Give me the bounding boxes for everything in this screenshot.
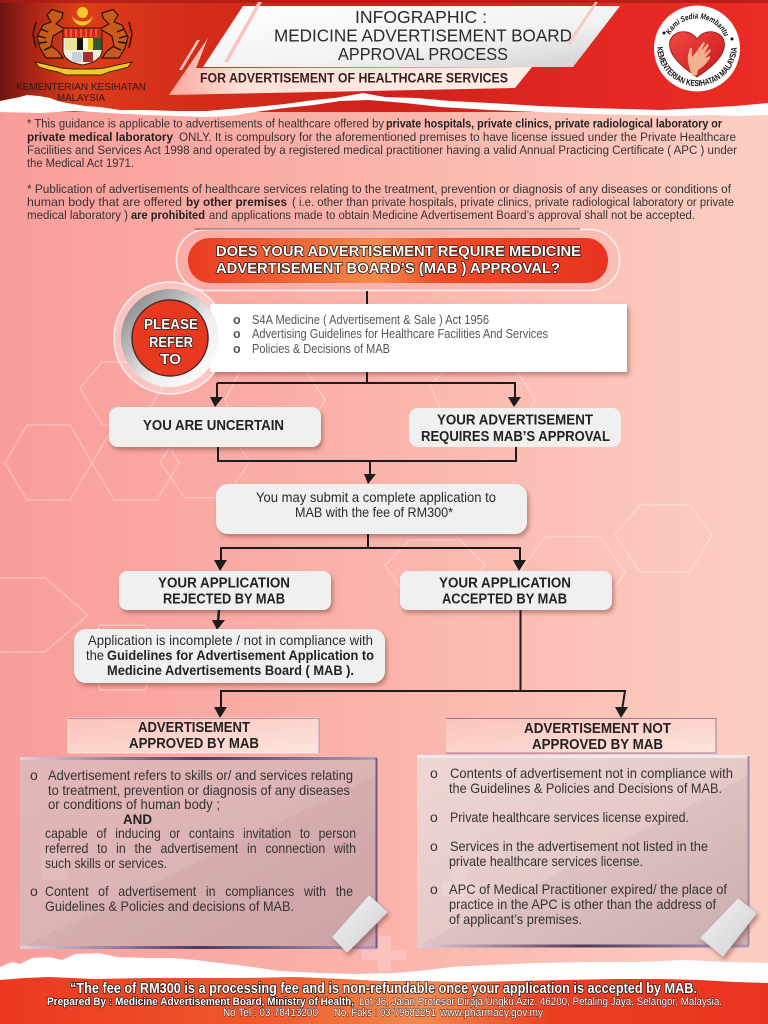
panel: references list: o [233, 327, 241, 341]
box: you are uncertain [109, 407, 321, 447]
faint cross watermark [362, 936, 406, 972]
arrow: rejected to reason [212, 610, 225, 630]
panel: references list: o [233, 313, 241, 327]
intro paragraph 2 [27, 182, 734, 222]
intro paragraph 2: are prohibited [131, 208, 205, 222]
box: application accepted [400, 571, 612, 610]
footer band [0, 953, 768, 1024]
panel: approved criteria: or conditions of human body ; [48, 796, 220, 812]
preparer credit: Lot 36, Jalan Profesor Diraja Ungku Aziz, 46200, Petaling Jaya, Selangor, Malaysia. [359, 996, 722, 1008]
badge: please refer to: TO [160, 352, 181, 368]
panel: approved criteria: such skills or services. [45, 855, 167, 871]
icon: ministry heart logo: KEMENTERIAN KESIHATAN MALAYSIA [657, 47, 738, 86]
panel: not approved criteria: o [430, 765, 438, 781]
panel: not approved criteria: the Guidelines & Policies and Decisions of MAB. [449, 780, 722, 796]
heading: advertisement approved: ADVERTISEMENT [138, 720, 250, 736]
intro paragraph 2: human body that are offered [27, 195, 182, 209]
box: rejection reason [74, 629, 385, 683]
icon: tape corner left [332, 895, 388, 953]
box: requires MAB approval: YOUR ADVERTISEMENT [437, 412, 593, 428]
intro paragraph 1: ONLY. It is compulsory for the aforementioned premises to have license issued under the Private Healthcare [179, 130, 736, 144]
box: application rejected [119, 571, 331, 610]
question pill [176, 229, 620, 290]
contact line: No. Faks : 03-79682251 [334, 1007, 436, 1019]
icon: ministry heart logo [654, 6, 740, 92]
arrow: branches merge to submit [218, 447, 516, 484]
arrows: references to branches [210, 372, 521, 407]
badge: please refer to: REFER [149, 335, 193, 351]
contact line [223, 1007, 543, 1019]
intro paragraph 1: private hospitals, private clinics, private radiological laboratory or [386, 116, 722, 130]
intro paragraph 1: Facilities and Services Act 1998 and operated by a registered medical practitioner having a valid Annual Practicing Certificate ( APC ) under [27, 143, 737, 157]
heading: advertisement approved: APPROVED BY MAB [129, 736, 259, 752]
panel: approved criteria: referred to in the advertisement in connection with [45, 840, 356, 856]
heading: advertisement not approved: APPROVED BY MAB [532, 737, 663, 753]
title banner [169, 2, 620, 95]
contact line: No Tel : 03-78413200 [223, 1007, 318, 1019]
icon: tape corner right [700, 898, 757, 957]
panel: approved criteria: o [30, 767, 38, 783]
box: rejection reason: Application is incomplete / not in compliance with [88, 632, 373, 648]
panel: not approved criteria: o [430, 809, 438, 825]
icon: Malaysian coat of arms [33, 7, 132, 75]
connector: question to references [366, 291, 368, 305]
intro paragraph 2: and applications made to obtain Medicine Advertisement Board’s approval shall not be accepted. [209, 208, 695, 222]
panel: approved criteria: AND [123, 811, 152, 827]
intro paragraph 2: medical laboratory ) [27, 208, 128, 222]
badge: please refer to: PLEASE [144, 317, 198, 333]
arrows: accepted to decisions [214, 610, 628, 718]
header band [0, 0, 768, 112]
panel: references list: Policies & Decisions of MAB [252, 342, 390, 356]
box: submit application: MAB with the fee of RM300* [295, 504, 453, 520]
intro paragraph 2: ( i.e. other than private hospitals, private clinics, private radiological laboratory or private [292, 195, 734, 209]
heading: advertisement approved [68, 718, 319, 753]
panel: approved criteria: capable of inducing or contains invitation to person [45, 825, 356, 841]
contact line: www.pharmacy.gov.my [439, 1007, 543, 1019]
intro paragraph 1 [27, 116, 737, 170]
panel: not approved criteria: Contents of advertisement not in compliance with [450, 765, 733, 781]
box: rejection reason: Guidelines for Advertisement Application to [107, 647, 374, 663]
icon: ministry heart logo: Kami Sedia Membantu [666, 12, 728, 36]
panel: not approved criteria: Services in the advertisement not listed in the [450, 838, 708, 854]
panel: not approved criteria: private healthcare services license. [449, 853, 643, 869]
torn paper edge top [0, 93, 768, 117]
box: you are uncertain: YOU ARE UNCERTAIN [143, 418, 284, 434]
preparer credit: Prepared By : Medicine Advertisement Board, Ministry of Health, [47, 996, 354, 1008]
badge: please refer to [114, 282, 226, 394]
box: application accepted: ACCEPTED BY MAB [442, 592, 567, 608]
panel: not approved criteria: o [430, 881, 438, 897]
intro paragraph 2: * Publication of advertisements of healthcare services relating to the treatment, prevention or diagnosis of any diseases or conditions of [27, 182, 732, 196]
panel: not approved criteria: APC of Medical Practitioner expired/ the place of [449, 881, 727, 897]
box: rejection reason: the [86, 647, 104, 663]
panel: approved criteria: Guidelines & Policies and decisions of MAB. [45, 898, 294, 914]
preparer credit [47, 996, 722, 1008]
question pill: ADVERTISEMENT BOARD’S (MAB ) APPROVAL? [216, 261, 560, 277]
ministry name: MALAYSIA [57, 93, 105, 104]
hexagon background pattern [0, 360, 712, 690]
arrows: submit to outcomes [214, 534, 526, 571]
box: application accepted: YOUR APPLICATION [439, 576, 571, 592]
intro paragraph 2: by other premises [186, 195, 287, 209]
panel: not approved criteria: Private healthcare services license expired. [450, 809, 689, 825]
ministry name: KEMENTERIAN KESIHATAN [16, 82, 146, 93]
box: application rejected: REJECTED BY MAB [163, 592, 285, 608]
title text: INFOGRAPHIC : [355, 7, 487, 27]
panel: not approved criteria: of applicant’s premises. [449, 911, 582, 927]
panel: not approved criteria: o [430, 838, 438, 854]
heading: advertisement not approved: ADVERTISEMENT NOT [524, 721, 671, 737]
panel: not approved criteria [417, 755, 750, 948]
box: requires MAB approval: REQUIRES MAB’S APPROVAL [421, 429, 610, 445]
fee note: “The fee of RM300 is a processing fee and is non-refundable once your application is accepted by MAB. [70, 981, 697, 997]
intro paragraph 1: the Medical Act 1971. [27, 156, 134, 170]
question pill: DOES YOUR ADVERTISEMENT REQUIRE MEDICINE [216, 244, 581, 260]
title text [274, 7, 572, 64]
intro paragraph 1: * This guidance is applicable to advertisements of healthcare offered by [27, 116, 385, 130]
panel: approved criteria: to treatment, prevention or diagnosis of any diseases [48, 782, 350, 798]
panel: approved criteria: o [30, 883, 38, 899]
intro paragraph 1: private medical laboratory [27, 130, 173, 144]
box: rejection reason: Medicine Advertisements Board ( MAB ). [107, 662, 354, 678]
panel: references list [210, 304, 627, 372]
subtitle: FOR ADVERTISEMENT OF HEALTHCARE SERVICES [200, 70, 508, 86]
box: application rejected: YOUR APPLICATION [158, 576, 290, 592]
panel: references list: Advertising Guidelines for Healthcare Facilities And Services [252, 327, 548, 341]
panel: references list: S4A Medicine ( Advertisement & Sale ) Act 1956 [252, 313, 489, 327]
title text: MEDICINE ADVERTISEMENT BOARD [274, 26, 572, 46]
box: requires MAB approval [409, 408, 621, 447]
panel: approved criteria: Content of advertisement in compliances with the [45, 883, 353, 899]
panel: references list: o [233, 342, 241, 356]
panel: approved criteria [20, 757, 378, 949]
panel: approved criteria: Advertisement refers to skills or/ and services relating [48, 767, 353, 783]
box: submit application: You may submit a complete application to [256, 489, 496, 505]
heading: advertisement not approved [446, 718, 716, 753]
box: submit application [216, 484, 527, 534]
ministry name [16, 82, 146, 104]
panel: not approved criteria: practice in the APC is other than the address of [449, 896, 716, 912]
title text: APPROVAL PROCESS [338, 44, 508, 64]
